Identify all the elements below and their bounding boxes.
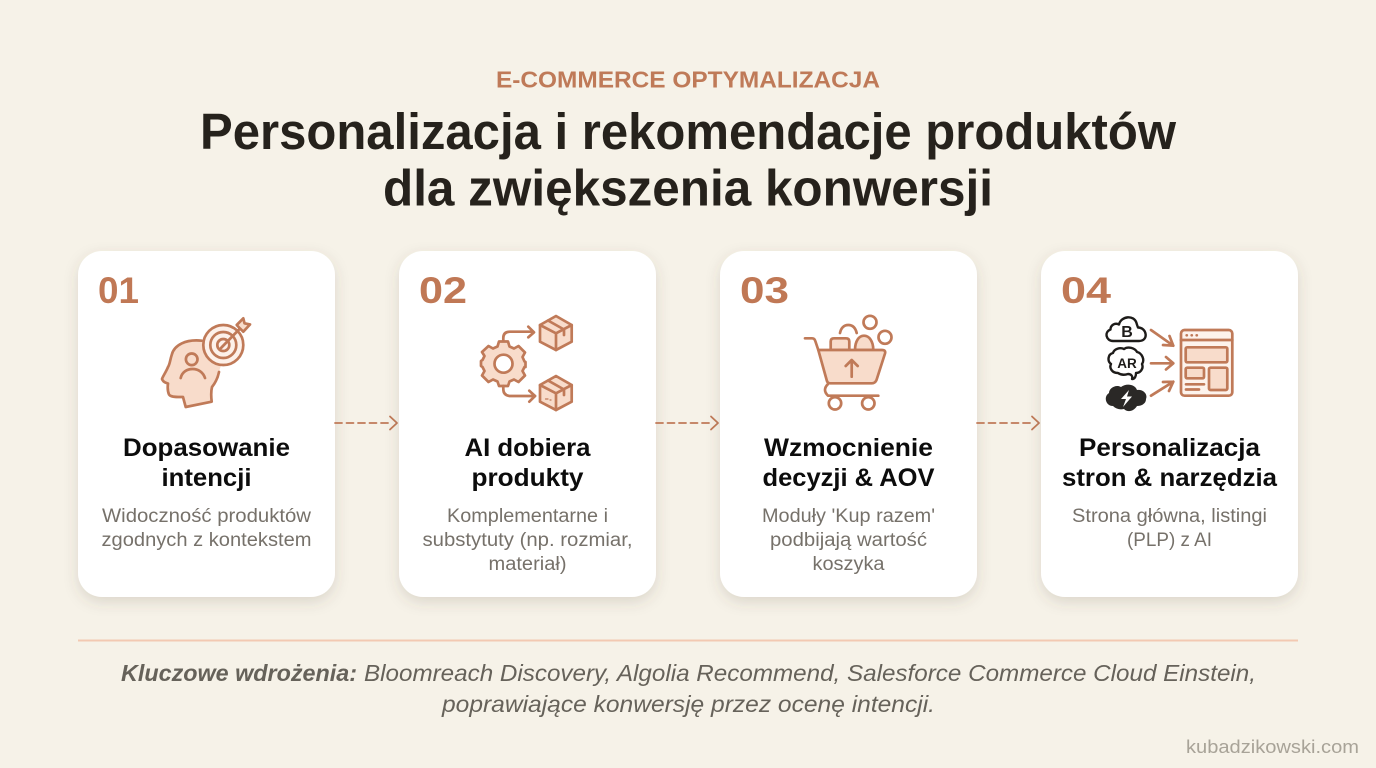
eyebrow heading: E-COMMERCE OPTYMALIZACJA	[496, 66, 880, 92]
description: Widoczność produktów	[102, 506, 311, 527]
heading: stron & narzędzia	[1062, 464, 1278, 492]
step number 01: 01	[98, 270, 139, 311]
icon: dark lightning cloud	[1106, 385, 1146, 411]
description: Moduły 'Kup razem'	[762, 506, 935, 527]
heading	[1062, 434, 1278, 492]
arrow 3 to 4	[977, 416, 1039, 430]
description: podbijają wartość	[770, 530, 927, 551]
description: zgodnych z kontekstem	[102, 530, 312, 551]
title: Personalizacja i rekomendacje produktów	[200, 103, 1176, 160]
icon: shopping cart	[805, 316, 892, 409]
description	[1072, 506, 1267, 551]
title: dla zwiększenia konwersji	[383, 160, 993, 216]
arrows to page	[1151, 330, 1173, 396]
icon: gear and boxes	[481, 316, 572, 410]
step number 03: 03	[740, 270, 789, 311]
description: substytuty (np. rozmiar,	[422, 530, 632, 551]
description	[762, 506, 935, 575]
arrow 2 to 3	[656, 416, 718, 430]
heading: AI dobiera	[464, 434, 592, 462]
description: materiał)	[488, 554, 566, 575]
heading: produkty	[472, 464, 584, 492]
description: (PLP) z AI	[1127, 530, 1212, 551]
description: Strona główna, listingi	[1072, 506, 1267, 527]
icon: Bloomreach cloud: B	[1121, 324, 1133, 341]
footer note: Bloomreach Discovery, Algolia Recommend, Salesforce Commerce Cloud Einstein,	[364, 660, 1256, 686]
icon: AR brain: AR	[1117, 356, 1137, 371]
arrow 1 to 2	[335, 416, 397, 430]
description	[102, 506, 312, 551]
panel: step 04	[1041, 251, 1298, 597]
description	[422, 506, 632, 575]
heading: intencji	[162, 464, 252, 492]
panel: step 03	[720, 251, 977, 597]
heading: Personalizacja	[1079, 434, 1261, 462]
heading	[762, 434, 935, 492]
heading: Dopasowanie	[123, 434, 290, 462]
panel: step 01	[78, 251, 335, 597]
icon: head with target	[162, 318, 250, 407]
heading: Wzmocnienie	[764, 434, 933, 462]
footer note	[121, 660, 1256, 717]
step number 04: 04	[1061, 270, 1112, 311]
icon: browser window	[1181, 330, 1232, 396]
watermark: kubadzikowski.com	[1186, 736, 1359, 757]
title	[200, 103, 1176, 216]
icon: tools to web page	[1106, 317, 1232, 411]
heading: decyzji & AOV	[762, 464, 935, 492]
footer note: Kluczowe wdrożenia:	[121, 660, 357, 686]
heading	[123, 434, 290, 492]
panel: step 02	[399, 251, 656, 597]
description: Komplementarne i	[447, 506, 608, 527]
heading	[464, 434, 592, 492]
footer note: poprawiające konwersję przez ocenę intencji.	[441, 691, 935, 717]
description: koszyka	[812, 554, 885, 575]
divider	[78, 640, 1298, 642]
step number 02: 02	[419, 270, 467, 311]
